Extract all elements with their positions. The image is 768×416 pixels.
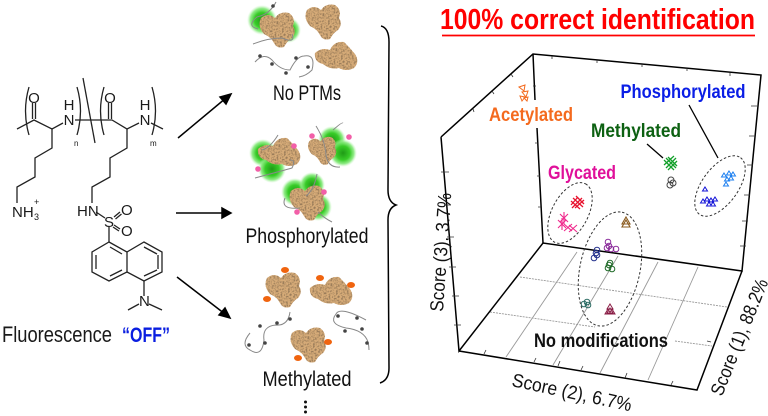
chemical structure: dansyl polymer: m [150,139,157,148]
floor grid [490,252,727,380]
markers: brown triangles [622,217,630,227]
vertical ellipsis [304,400,307,414]
markers: navy circles [591,247,600,261]
chemical structure: dansyl polymer: O [121,223,133,240]
markers: teal circles [581,299,591,308]
group ellipses [539,147,755,332]
3D PCA score plot [427,54,768,416]
cluster label: Acetylated: Acetylated [489,105,573,126]
panel: Phosphorylated sensor array [246,123,368,248]
chemical structure: dansyl polymer: H [140,97,150,114]
arrow: to Phosphorylated [176,208,231,218]
arrow: to No PTMs [178,94,231,138]
axes box [441,54,761,390]
chemical structure: dansyl polymer [12,78,163,310]
cluster label: Phosphorylated: Phosphorylated [620,82,746,103]
markers: glycated pink [558,212,577,232]
chemical structure: dansyl polymer: NH [12,204,34,221]
label: Fluorescence OFF: Fluorescence [2,322,112,347]
chemical structure: dansyl polymer: O [121,202,133,219]
label: Fluorescence OFF: “OFF” [122,324,170,347]
chemical structure: dansyl polymer: S [104,214,114,231]
chemical structure: dansyl polymer: H [64,97,74,114]
panel: No PTMs sensor array [247,2,357,105]
markers: purple circles [604,239,619,252]
markers: phosphorylated light [722,171,736,186]
chemical structure: dansyl polymer: 3 [34,212,39,222]
chemical structure: dansyl polymer: N [64,112,74,129]
chemical structure: dansyl polymer: O [104,90,116,107]
cluster label: No modifications: No modifications [534,331,668,352]
panel: No PTMs sensor array: No PTMs [273,82,341,105]
axis label: score 3: Score (3), 3.7% [427,192,456,312]
chemical structure: dansyl polymer: O [28,90,40,107]
cluster label: Glycated: Glycated [548,163,616,184]
brace [380,26,396,383]
markers: green circles [605,260,615,272]
chemical structure: dansyl polymer: n [74,139,78,148]
panel: Methylated sensor array: Methylated [262,368,352,391]
markers: open circles [667,177,676,188]
chemical structure: dansyl polymer: + [34,197,39,207]
panel: Methylated sensor array [245,267,369,391]
chemical structure: dansyl polymer: N [140,112,150,129]
chemical structure: dansyl polymer: HN [77,203,99,220]
panel: Phosphorylated sensor array: Phosphorylated [246,225,368,248]
markers: methylated [664,156,677,170]
cluster label: Methylated: Methylated [591,121,681,142]
markers: phosphorylated dark [700,187,718,206]
markers: maroon triangles [605,304,615,314]
markers: glycated red [571,196,584,209]
leader lines [647,105,718,158]
arrow: to Methylated [177,277,230,318]
chemical structure: dansyl polymer: N [139,293,150,310]
axis ticks [441,56,757,385]
markers: acetylated [519,85,528,101]
